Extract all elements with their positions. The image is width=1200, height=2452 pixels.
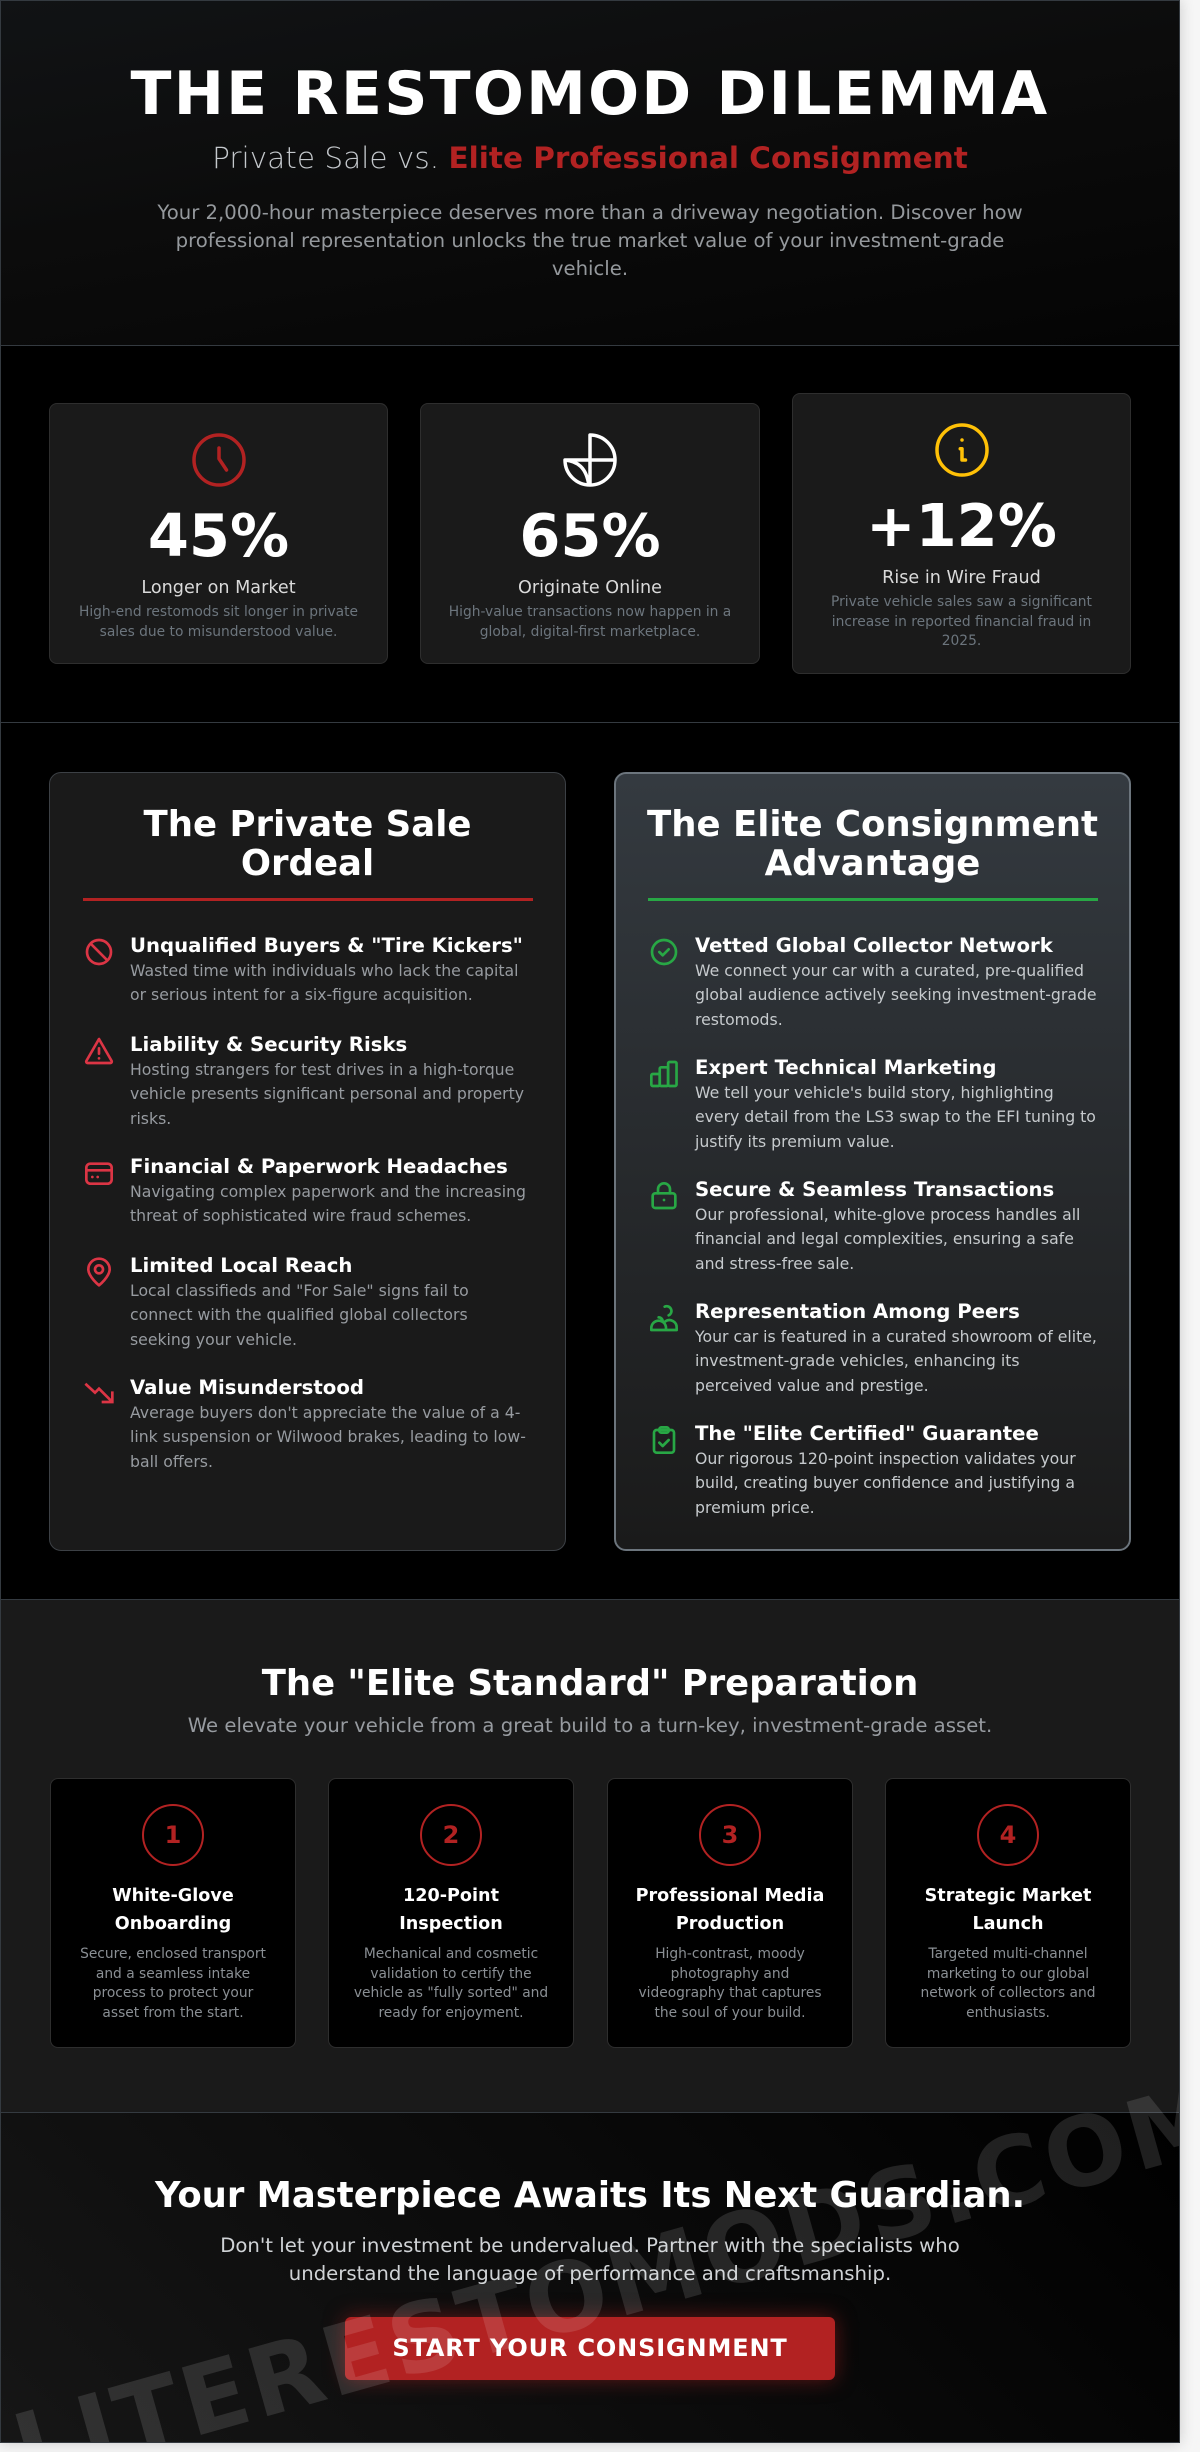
item text (695, 961, 1097, 1029)
item text (695, 1205, 1080, 1273)
panel heading: Ordeal (241, 843, 374, 884)
item: value misunderstood (84, 1376, 526, 1471)
stat card: wire fraud (792, 393, 1131, 674)
step text: enthusiasts. (966, 2005, 1050, 2021)
item text: premium price. (695, 1498, 815, 1517)
icon: check circle (650, 938, 678, 966)
stat description: Private vehicle sales saw a significant (831, 594, 1092, 610)
cta text (0, 2232, 1180, 2288)
step title (329, 1883, 573, 1938)
cta button: START YOUR CONSIGNMENT (392, 2334, 788, 2362)
item text: every detail from the LS3 swap to the EFI tuning to (695, 1107, 1096, 1126)
item text: financial and legal complexities, ensuring a safe (695, 1229, 1074, 1248)
item: representation (650, 1300, 1097, 1395)
icon: map pin (87, 1257, 111, 1287)
step title: Onboarding (115, 1914, 231, 1934)
icon: clipboard check (652, 1426, 676, 1454)
item text: We tell your vehicle's build story, highlighting (695, 1083, 1054, 1102)
intro paragraph: Your 2,000-hour masterpiece deserves more than a driveway negotiation. Discover how (157, 201, 1023, 224)
item text (695, 1327, 1097, 1395)
stat label: Originate Online (518, 578, 662, 598)
icon: trend down (84, 1382, 114, 1404)
cta text: understand the language of performance and craftsmanship. (289, 2262, 891, 2285)
stats section (0, 346, 1180, 723)
step number: 1 (165, 1821, 181, 1849)
item text: connect with the qualified global collectors (130, 1305, 468, 1324)
icon: ban (86, 938, 112, 966)
step text: Mechanical and cosmetic (364, 1946, 538, 1962)
panel heading: The Elite Consignment (647, 804, 1098, 845)
step text: Secure, enclosed transport (80, 1946, 266, 1962)
preparation subheading: We elevate your vehicle from a great build to a turn-key, investment-grade asset. (188, 1714, 992, 1737)
item text: ball offers. (130, 1452, 213, 1471)
item text (130, 961, 518, 1004)
item text: Your car is featured in a curated showroom of elite, (695, 1327, 1097, 1346)
item text: and stress-free sale. (695, 1254, 854, 1273)
stat label: Longer on Market (141, 578, 296, 598)
preparation section (0, 1600, 1180, 2113)
step text (886, 1945, 1130, 2024)
icon: clock (192, 433, 246, 487)
cta text: Don't let your investment be undervalued. Partner with the specialists who (220, 2234, 960, 2257)
item text: threat of sophisticated wire fraud schemes. (130, 1206, 471, 1225)
item title: Financial & Paperwork Headaches (130, 1155, 508, 1178)
panel heading: Advantage (765, 843, 980, 884)
step text: ready for enjoyment. (378, 2005, 524, 2021)
step text: Targeted multi-channel (928, 1946, 1088, 1962)
item text: justify its premium value. (695, 1132, 895, 1151)
subtitle: Private Sale vs. Elite Professional Consignment (212, 141, 968, 175)
cta heading: Your Masterpiece Awaits Its Next Guardian. (155, 2175, 1025, 2216)
step 1 (50, 1778, 296, 2048)
stat value: +12% (866, 491, 1057, 560)
step title: Strategic Market (925, 1886, 1091, 1906)
step 2 (328, 1778, 574, 2048)
panel heading (144, 804, 471, 884)
stat description (831, 594, 1092, 649)
item text: Average buyers don't appreciate the value of a 4- (130, 1403, 520, 1422)
step text (608, 1945, 852, 2024)
item text: Wasted time with individuals who lack the capital (130, 961, 518, 980)
item text (695, 1449, 1076, 1517)
stat value: 45% (148, 501, 289, 570)
step title: 120-Point (403, 1886, 499, 1906)
item text: perceived value and prestige. (695, 1376, 929, 1395)
icon: pie chart (563, 433, 617, 487)
item text (130, 1060, 524, 1128)
item title: Vetted Global Collector Network (695, 934, 1053, 957)
item title: Expert Technical Marketing (695, 1056, 997, 1079)
step text: marketing to our global (927, 1966, 1089, 1982)
step 4 (885, 1778, 1131, 2048)
stat description (79, 604, 358, 640)
item: certified guarantee (652, 1422, 1076, 1517)
item text: vehicle presents significant personal and property (130, 1084, 524, 1103)
icon: info (935, 423, 989, 477)
item: secure transactions (651, 1178, 1080, 1273)
divider (648, 898, 1098, 901)
item text: Local classifieds and "For Sale" signs fail to (130, 1281, 469, 1300)
step number (420, 1804, 482, 1866)
step text: asset from the start. (102, 2005, 244, 2021)
step title: Launch (972, 1914, 1044, 1934)
icon: warning (84, 1038, 114, 1064)
item text: We connect your car with a curated, pre-qualified (695, 961, 1084, 980)
item: technical marketing (650, 1056, 1096, 1151)
step number (699, 1804, 761, 1866)
item text (130, 1182, 526, 1225)
title: THE RESTOMOD DILEMMA (131, 59, 1049, 129)
step number: 2 (443, 1821, 459, 1849)
step text: photography and (671, 1966, 789, 1982)
item title: Value Misunderstood (130, 1376, 364, 1399)
item text (130, 1281, 469, 1349)
item: liability (84, 1033, 524, 1128)
stat description: High-value transactions now happen in a (449, 604, 731, 620)
stat description: 2025. (942, 633, 981, 649)
panel: private sale (49, 772, 566, 1551)
step 3 (607, 1778, 853, 2048)
item title: Representation Among Peers (695, 1300, 1020, 1323)
step title: Professional Media (636, 1886, 824, 1906)
icon: card (85, 1162, 113, 1185)
step text: process to protect your (93, 1985, 253, 2001)
step text: High-contrast, moody (655, 1946, 805, 1962)
stat label: Rise in Wire Fraud (882, 568, 1041, 588)
step title: White-Glove (112, 1886, 234, 1906)
item text: Navigating complex paperwork and the increasing (130, 1182, 526, 1201)
step text: and a seamless intake (96, 1966, 250, 1982)
step text (51, 1945, 295, 2024)
icon: lock (651, 1182, 677, 1210)
item text: build, creating buyer confidence and justifying a (695, 1473, 1075, 1492)
step number: 3 (722, 1821, 738, 1849)
item text: Our professional, white-glove process handles all (695, 1205, 1080, 1224)
item title: The "Elite Certified" Guarantee (695, 1422, 1039, 1445)
stat description: High-end restomods sit longer in private (79, 604, 358, 620)
item text: seeking your vehicle. (130, 1330, 297, 1349)
step number (977, 1804, 1039, 1866)
item text: investment-grade vehicles, enhancing its (695, 1351, 1020, 1370)
panel heading: The Private Sale (144, 804, 471, 845)
step title (608, 1883, 852, 1938)
item title: Liability & Security Risks (130, 1033, 407, 1056)
step title: Inspection (399, 1914, 503, 1934)
item text: restomods. (695, 1010, 783, 1029)
item text: or serious intent for a six-figure acquisition. (130, 985, 473, 1004)
stat card: longer on market (49, 403, 388, 664)
item text (130, 1403, 526, 1471)
step text: videography that captures (638, 1985, 822, 2001)
item: local reach (87, 1254, 469, 1349)
item title: Unqualified Buyers & "Tire Kickers" (130, 934, 523, 957)
item text: Our rigorous 120-point inspection validates your (695, 1449, 1076, 1468)
divider (83, 898, 533, 901)
step number: 4 (1000, 1821, 1016, 1849)
step text: the soul of your build. (654, 2005, 806, 2021)
item text: global audience actively seeking investment-grade (695, 985, 1097, 1004)
panel: elite consignment (614, 772, 1131, 1551)
item text: link suspension or Wilwood brakes, leading to low- (130, 1427, 526, 1446)
item text: Hosting strangers for test drives in a high-torque (130, 1060, 514, 1079)
item: vetted network (650, 934, 1097, 1029)
stat description: increase in reported financial fraud in (832, 614, 1091, 630)
step text: vehicle as "fully sorted" and (354, 1985, 548, 2001)
item text (694, 1083, 1096, 1151)
stat description: global, digital-first marketplace. (480, 624, 700, 640)
step number (142, 1804, 204, 1866)
icon: people (650, 1304, 678, 1332)
preparation heading: The "Elite Standard" Preparation (262, 1663, 918, 1704)
step text: validation to certify the (370, 1966, 532, 1982)
item: unqualified buyers (86, 934, 523, 1004)
item: paperwork (85, 1155, 526, 1225)
step text: network of collectors and (921, 1985, 1095, 2001)
stat card: originate online (420, 403, 760, 664)
icon: bar chart (650, 1060, 678, 1088)
cta button (345, 2317, 835, 2380)
stat value: 65% (519, 501, 661, 570)
step title: Production (676, 1914, 784, 1934)
step title (51, 1883, 295, 1938)
item text: risks. (130, 1109, 171, 1128)
stat description: sales due to misunderstood value. (100, 624, 337, 640)
stat description (449, 604, 731, 640)
intro paragraph: vehicle. (552, 257, 628, 280)
intro paragraph: professional representation unlocks the true market value of your investment-grade (176, 229, 1004, 252)
item title: Limited Local Reach (130, 1254, 352, 1277)
step title (886, 1883, 1130, 1938)
header section (0, 0, 1180, 346)
call to action section (0, 2113, 1180, 2443)
item title: Secure & Seamless Transactions (695, 1178, 1054, 1201)
panel heading (647, 804, 1098, 884)
step text (329, 1945, 573, 2024)
comparison section (0, 723, 1180, 1600)
intro paragraph (157, 201, 1023, 280)
